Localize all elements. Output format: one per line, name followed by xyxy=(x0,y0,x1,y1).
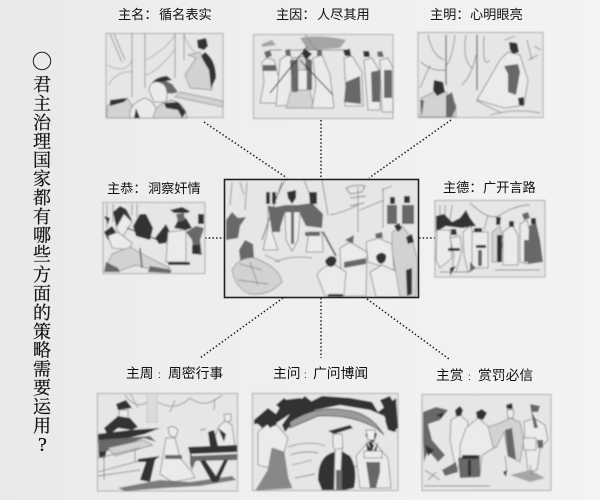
illustration: 主恭 xyxy=(103,202,205,274)
panel: 主赏 赏罚必信 xyxy=(422,368,551,490)
label: 主周: 主周 xyxy=(126,366,154,381)
label: 主周: 周密行事 xyxy=(168,365,223,381)
vertical title: 君主治理国家都有哪些方面的策略需要运用 xyxy=(33,75,52,436)
panel: 主因 人尽其用 xyxy=(254,7,393,118)
panel: 主名 循名表实 xyxy=(106,7,223,118)
label: 主因: 主因： xyxy=(276,7,316,22)
panel: 主周 周密行事 xyxy=(98,365,238,491)
label: 主名: 循名表实 xyxy=(159,7,212,22)
panel: 主恭 洞察奸情 xyxy=(103,181,205,274)
label: 主周: : xyxy=(158,370,161,381)
label: 主德: 主德： xyxy=(443,180,483,195)
label: 主赏: : xyxy=(468,372,471,383)
label: 主问: 广问博闻 xyxy=(313,365,368,381)
label: 主因: 人尽其用 xyxy=(317,7,370,22)
illustration: central scene xyxy=(224,180,418,298)
label: 主恭: 主恭： xyxy=(107,181,147,196)
illustration: 主赏 xyxy=(422,394,551,490)
dotted connectors xyxy=(200,120,451,359)
illustration: 主周 xyxy=(98,393,238,491)
illustration: 主名 xyxy=(106,33,223,118)
illustration: 主德 xyxy=(435,200,545,277)
illustration: 主因 xyxy=(254,34,393,118)
label: 主德: 广开言路 xyxy=(483,180,536,195)
panel: central scene xyxy=(224,180,418,298)
panel: 主问 广问博闻 xyxy=(252,365,398,490)
label: 主赏: 主赏 xyxy=(436,368,464,383)
panel: 主明 心明眼亮 xyxy=(418,6,543,118)
label: 主明: 心明眼亮 xyxy=(470,6,523,22)
illustration: 主明 xyxy=(418,32,543,118)
label: 主问: 主问 xyxy=(273,366,301,381)
label: 主问: : xyxy=(304,370,307,381)
vertical title: ? xyxy=(38,434,47,456)
label: 主明: 主明： xyxy=(430,7,470,22)
label: 主名: 主名： xyxy=(118,7,158,22)
panel: 主德 广开言路 xyxy=(435,180,545,277)
label: 主恭: 洞察奸情 xyxy=(148,181,201,196)
illustration: 主问 xyxy=(252,394,398,490)
label: 主赏: 赏罚必信 xyxy=(478,368,533,383)
